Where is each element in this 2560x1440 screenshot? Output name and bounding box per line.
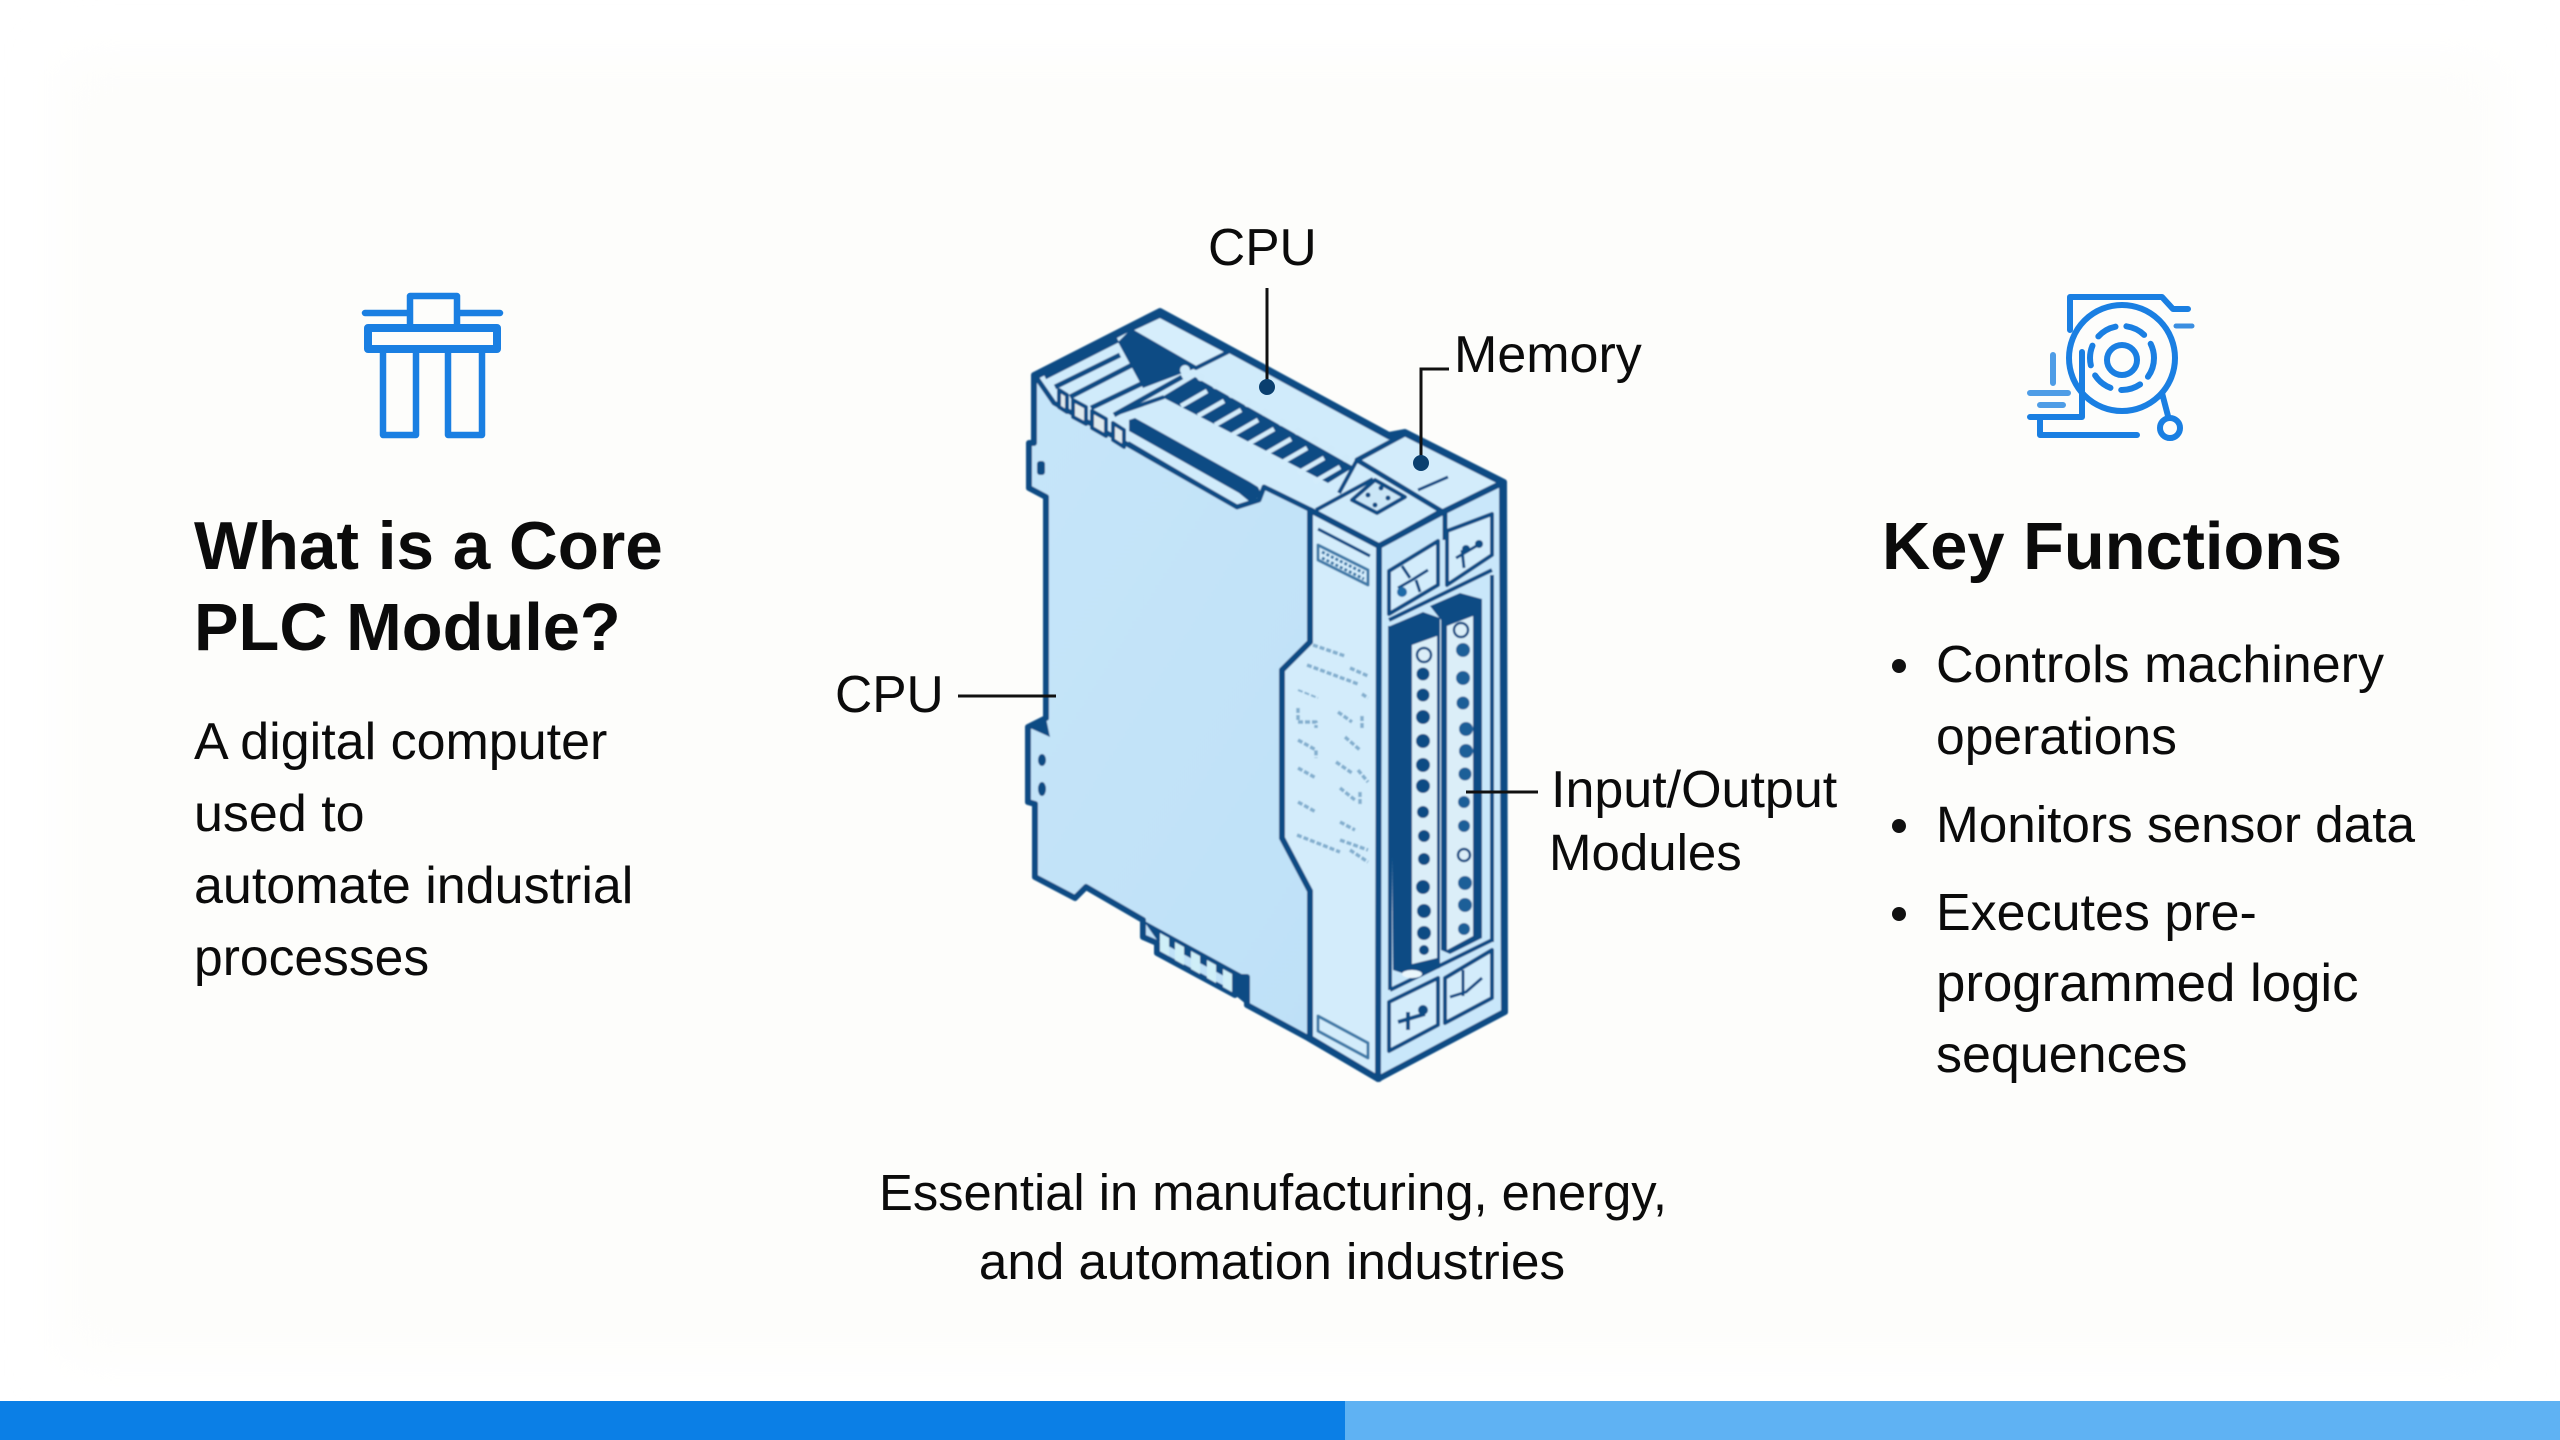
vent band	[1162, 377, 1354, 483]
bullet 1: Controls machinery	[1936, 636, 2384, 694]
bullet 2: Monitors sensor data	[1936, 796, 2415, 853]
edge blocks	[1059, 390, 1124, 447]
DIP block	[1352, 480, 1405, 513]
module silhouette	[1028, 311, 1505, 1079]
terminal block left	[1390, 612, 1440, 978]
caption	[879, 1164, 1667, 1290]
heading: Key Functions: Key Functions	[1882, 510, 2342, 584]
heading: What is a Core PLC Module?: What is a Core	[194, 509, 663, 584]
callout: Memory	[1413, 326, 1642, 471]
dark latch	[1118, 330, 1196, 388]
text block: definition	[194, 713, 633, 986]
status LEDs	[1180, 365, 1350, 462]
callout: Input/Output Modules: Modules	[1549, 824, 1742, 881]
lower right connector panel	[1445, 950, 1492, 1023]
caption: Essential in manufacturing, energy,	[879, 1164, 1667, 1221]
front face label panel	[1282, 510, 1379, 1079]
right icon: functions dial	[2030, 297, 2192, 438]
callout: Input/Output Modules: Input/Output	[1551, 761, 1838, 819]
label plate bottom	[1318, 1016, 1368, 1058]
callout: Memory: Memory	[1454, 326, 1642, 384]
left icon: module pillars	[365, 296, 500, 435]
bullet 3: Executes pre-	[1936, 884, 2257, 942]
top face	[1036, 313, 1443, 546]
diagram: PLC module illustration	[1028, 311, 1505, 1079]
left stripes	[1045, 340, 1182, 415]
callout: Input/Output Modules	[1466, 761, 1838, 881]
upper left connector panel	[1389, 541, 1438, 614]
callout: CPU left: CPU	[835, 665, 944, 723]
text block: definition: automate industrial	[194, 857, 633, 915]
separator and rails	[1389, 570, 1492, 990]
faint spec marks	[1297, 645, 1368, 862]
side rail clip holes	[1030, 461, 1050, 796]
text block: definition: A digital computer	[194, 713, 607, 771]
long slot	[1129, 418, 1262, 502]
lower left connector panel	[1389, 978, 1438, 1051]
label plate top	[1318, 529, 1370, 585]
text block: definition: processes	[194, 928, 429, 986]
list: key functions	[1892, 636, 2415, 1084]
memory block top	[1357, 434, 1502, 512]
caption: and automation industries	[979, 1233, 1565, 1290]
upper right connector panel	[1447, 514, 1492, 585]
callout: CPU top: CPU	[1208, 218, 1317, 276]
top compartment	[1130, 316, 1228, 368]
terminal block right	[1430, 593, 1482, 954]
bullet 1	[1892, 636, 2384, 765]
upper ridge divider	[1118, 352, 1357, 493]
vent slits	[1181, 391, 1340, 482]
text block: definition: used to	[194, 785, 365, 843]
callout: CPU top	[1208, 218, 1317, 395]
right face	[1378, 483, 1504, 1079]
bullet 1: operations	[1936, 707, 2177, 765]
bottom DIN connector	[1143, 920, 1247, 1005]
bullet 3: programmed logic	[1936, 954, 2359, 1013]
heading: What is a Core PLC Module?: PLC Module?	[194, 591, 621, 665]
footer bar	[0, 1401, 2560, 1440]
bullet 3	[1892, 884, 2359, 1084]
bullet 3: sequences	[1936, 1026, 2188, 1084]
heading: What is a Core PLC Module?	[194, 509, 663, 665]
